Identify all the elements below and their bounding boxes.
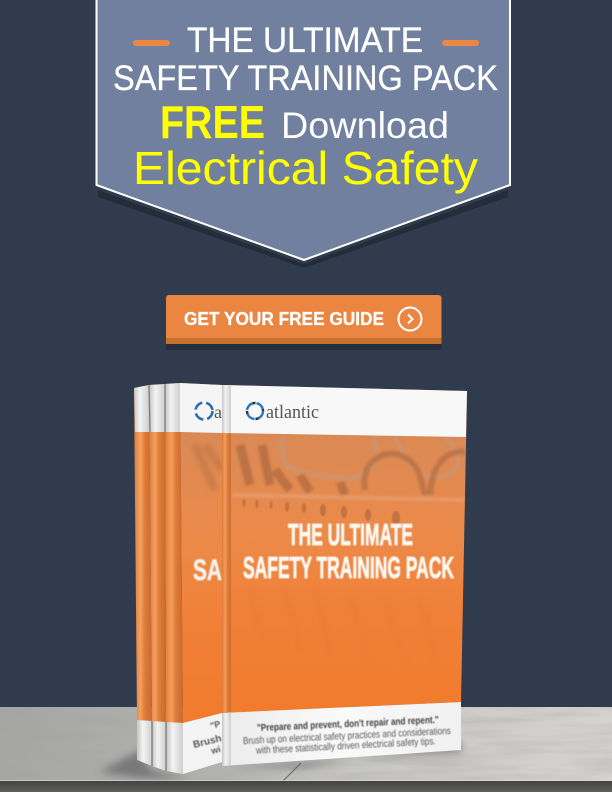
cover blurb: Brush up on electrical safety practices and considerations	[243, 726, 451, 747]
cover blurb: with these statistically driven electrical safety tips.	[255, 736, 436, 757]
logo wordmark: atlantic	[266, 403, 319, 423]
cover blurb: "Prepare and prevent, don't repair and repent."	[257, 715, 439, 734]
back blurb fragments: wi	[209, 744, 222, 756]
cover blurb	[243, 715, 451, 757]
banner shape	[96, 0, 510, 260]
icon: arrow circle	[398, 308, 422, 330]
heading line 2: SAFETY TRAINING PACK	[113, 59, 498, 98]
Electrical Safety: Electrical Safety	[133, 142, 478, 194]
banner	[96, 0, 510, 268]
book stack	[100, 383, 467, 778]
button shadow	[166, 342, 442, 350]
logo ring	[247, 403, 263, 419]
atlantic logo	[247, 403, 319, 423]
back blurb fragments	[192, 719, 223, 756]
floor	[0, 707, 612, 792]
cover rack holes	[242, 499, 400, 525]
back title fragment: SA	[193, 554, 222, 587]
back book 3 spine	[165, 383, 183, 774]
orange dash right	[442, 40, 479, 46]
cover wires photo	[232, 437, 465, 500]
banner shadow	[98, 190, 508, 268]
floor shadow under front book	[222, 742, 462, 768]
front white footer	[222, 702, 461, 766]
back book 1 spine	[134, 385, 152, 766]
cover title: SAFETY TRAINING PACK	[243, 550, 454, 585]
FREE: FREE	[160, 96, 265, 148]
lower cover photo ghost	[250, 590, 440, 670]
floor shadow left of books	[100, 750, 190, 778]
back book 2 spine	[149, 384, 166, 771]
heading line 1: THE ULTIMATE	[187, 21, 423, 60]
spine separators	[149, 384, 166, 771]
cover title	[243, 517, 454, 585]
Download: Download	[281, 105, 449, 146]
back book 3 cover	[180, 383, 223, 774]
front cover orange	[222, 385, 467, 713]
back blurb fragments: Brush	[192, 733, 223, 751]
button	[166, 295, 442, 350]
front book	[222, 385, 467, 766]
button label: GET YOUR FREE GUIDE	[184, 309, 384, 329]
spine band	[222, 385, 231, 713]
front white header	[222, 385, 467, 437]
button body	[166, 295, 442, 341]
back blurb fragments: "P	[209, 719, 221, 731]
orange dash left	[133, 40, 170, 46]
back logo	[196, 402, 222, 422]
back logo: a	[214, 402, 222, 422]
cover title: THE ULTIMATE	[288, 517, 413, 552]
